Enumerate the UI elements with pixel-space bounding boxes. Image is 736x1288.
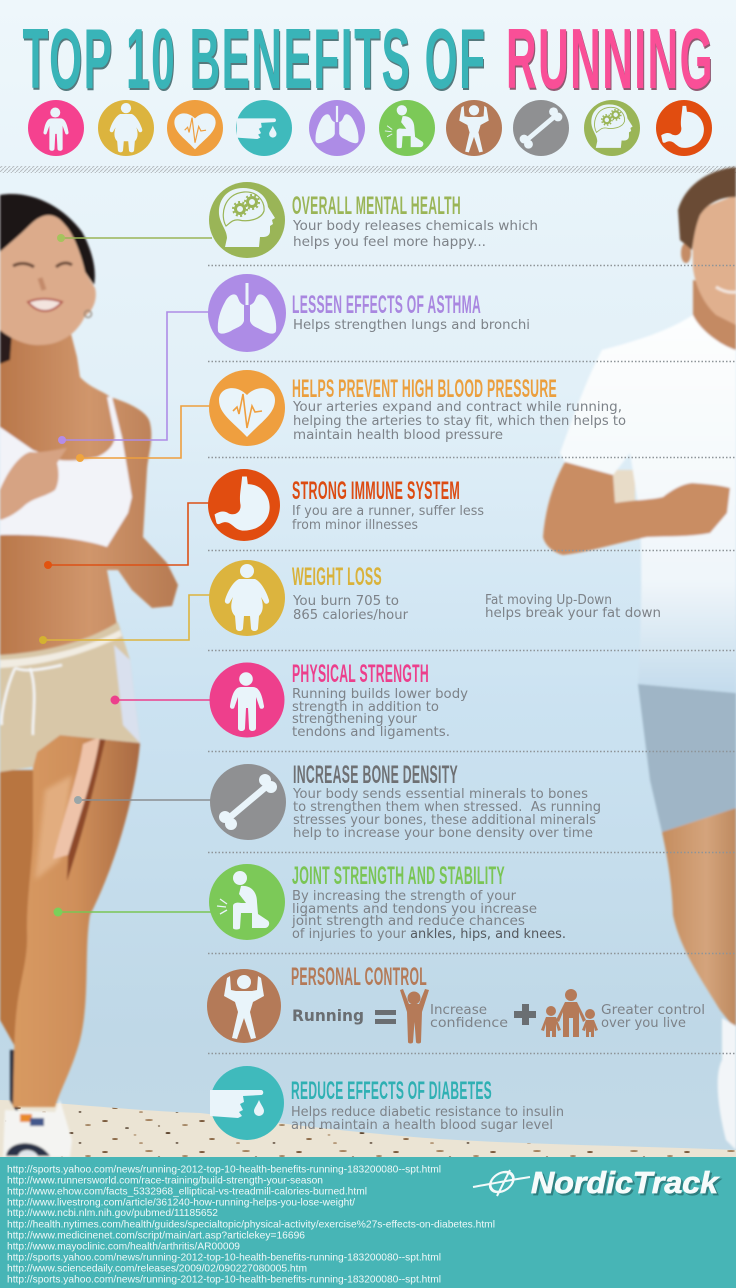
fist on chest <box>0 448 67 520</box>
connector: blood pressure <box>76 406 212 462</box>
front leg <box>13 735 140 1107</box>
panel: increase bone density: INCREASE BONE DENSITY <box>293 761 458 789</box>
icon: confident person <box>400 989 429 1044</box>
connector: weight <box>39 595 212 644</box>
text block: helping the arteries to stay fit, which then helps to <box>293 413 626 429</box>
plus sign <box>514 1004 536 1025</box>
logo text: NordicTrack <box>531 1165 720 1200</box>
panel: overall mental health <box>209 182 538 258</box>
text block: fat moving: Fat moving Up-Down <box>485 592 612 608</box>
text block <box>292 503 484 533</box>
icon: heart <box>209 370 285 446</box>
icon: brain head <box>209 182 285 258</box>
face <box>692 195 736 325</box>
text block: tendons and ligaments. <box>292 724 450 740</box>
text block <box>292 218 538 250</box>
text: greater control: over you live <box>601 1015 686 1031</box>
sand dune <box>0 1100 736 1160</box>
text block <box>292 786 601 841</box>
hair <box>678 167 736 250</box>
text block: By increasing the strength of your <box>292 888 516 904</box>
text block: ligaments and tendons you increase <box>292 901 537 917</box>
icon: overweight figure <box>98 100 154 156</box>
text block: calories: You burn 705 to <box>292 593 399 609</box>
equals sign <box>375 1010 396 1024</box>
shorts <box>0 622 140 772</box>
text block: strength in addition to <box>292 699 439 715</box>
leg shadow stripe <box>67 737 106 881</box>
text block: stresses your bones, these additional minerals <box>293 812 596 828</box>
footer band <box>0 1157 736 1288</box>
text block <box>292 399 626 443</box>
panel: strong immune system: STRONG IMMUNE SYSTEM <box>292 477 460 505</box>
panel: increase bone density <box>210 761 601 841</box>
text: increase confidence: Increase <box>430 1002 487 1018</box>
panel: weight loss: WEIGHT LOSS <box>292 563 382 591</box>
text block: Your arteries expand and contract while running, <box>292 399 622 415</box>
logo: NordicTrack <box>473 1165 722 1202</box>
panel: weight loss <box>209 560 661 636</box>
panel: helps prevent high blood pressure <box>209 370 626 446</box>
source links: http://www.medicinenet.com/script/main/art.asp?articlekey=16696 <box>7 1230 305 1242</box>
photo: man runner <box>543 167 736 1150</box>
icon: finger and drop <box>236 100 292 156</box>
icon: bone <box>513 100 569 156</box>
text block <box>292 686 468 740</box>
text block: calories: 865 calories/hour <box>293 607 408 623</box>
panel: strong immune system <box>208 469 484 541</box>
icon: overweight figure <box>209 560 285 636</box>
panel: personal control: PERSONAL CONTROL <box>291 963 427 991</box>
back shoe <box>10 1050 18 1115</box>
icon: family <box>541 989 598 1037</box>
panel: joint strength and stability: JOINT STRENGTH AND STABILITY <box>292 862 505 890</box>
logo swoosh <box>473 1170 530 1196</box>
text block: from minor illnesses <box>292 517 418 533</box>
text block: of injuries to your ankles, hips, and knees. <box>292 926 566 942</box>
top icon row <box>28 100 712 156</box>
text block: calories <box>292 593 408 623</box>
icon: lungs <box>208 274 286 352</box>
text block: Running builds lower body <box>292 686 468 702</box>
source links: http://www.sciencedaily.com/releases/2009/02/090227080005.htm <box>7 1262 307 1274</box>
text block: strengthening your <box>292 711 417 727</box>
text block: and maintain a health blood sugar level <box>291 1117 553 1133</box>
arm <box>543 462 730 555</box>
connector: immune <box>44 503 210 569</box>
panel: personal control <box>207 963 705 1044</box>
source links: http://sports.yahoo.com/news/running-2012-top-10-health-benefits-running-183200080--spt.html <box>7 1164 441 1176</box>
text block <box>291 888 566 942</box>
connector: bone <box>74 796 212 804</box>
ear <box>681 243 691 263</box>
smile <box>716 287 736 292</box>
text block: Helps reduce diabetic resistance to insulin <box>291 1104 564 1120</box>
source links: http://health.nytimes.com/health/guides/specialtopic/physical-activity/exercise%27s-effects-on-diabetes.html <box>7 1218 495 1230</box>
source links: http://www.runnersworld.com/race-training/build-strength-your-season <box>7 1174 323 1186</box>
connector: strength <box>110 696 212 704</box>
icon: heart <box>167 100 223 156</box>
connector: joint <box>54 908 212 916</box>
icon: person <box>210 662 284 738</box>
icon: brain head <box>584 100 640 156</box>
icon: flexing figure <box>207 969 281 1043</box>
torso and near arm <box>0 330 178 660</box>
thigh light patch <box>35 775 72 880</box>
leg highlight stripe <box>53 737 100 859</box>
shoe <box>718 1018 736 1150</box>
text block: maintain health blood pressure <box>293 427 503 443</box>
icon: finger and drop <box>210 1066 284 1140</box>
beige gap <box>605 470 635 510</box>
source links: http://sports.yahoo.com/news/running-2012-top-10-health-benefits-running-183200080--spt.html <box>7 1252 441 1264</box>
icon: lungs <box>309 100 365 156</box>
icon: bone <box>210 764 286 840</box>
connector: asthma <box>58 312 210 444</box>
panel: joint strength and stability <box>209 862 566 942</box>
front leg <box>662 808 736 1030</box>
icon: flexing figure <box>446 100 502 156</box>
text block: fat moving <box>485 592 661 621</box>
shorts <box>638 684 736 832</box>
text block: to strengthen them when stressed. As running <box>293 799 601 815</box>
panel: lessen effects of asthma <box>208 274 530 352</box>
connector: mental health <box>57 234 212 242</box>
source links: http://sports.yahoo.com/news/running-2012-top-10-health-benefits-running-183200080--spt.html <box>7 1274 441 1286</box>
source links: http://www.mayoclinic.com/health/arthritis/AR00009 <box>7 1240 240 1252</box>
panel: reduce effects of diabetes <box>210 1066 564 1140</box>
back leg <box>0 770 36 1050</box>
photo: woman runner <box>0 194 178 1157</box>
source links <box>7 1164 495 1286</box>
hatched header band <box>0 166 736 173</box>
hair back <box>0 194 95 285</box>
panel: reduce effects of diabetes: REDUCE EFFECTS OF DIABETES <box>291 1077 492 1105</box>
title <box>22 12 715 109</box>
text: increase confidence: confidence <box>430 1015 508 1031</box>
icon: person <box>28 100 84 156</box>
panel: physical strength: PHYSICAL STRENGTH <box>292 660 429 688</box>
logo shadow: NordicTrack <box>533 1167 722 1202</box>
icon: kneeling figure <box>209 864 285 940</box>
shirt <box>560 315 736 693</box>
hair lock <box>0 322 12 364</box>
text block: Your body releases chemicals which <box>292 218 538 234</box>
bra top <box>0 397 132 547</box>
text block: Helps strengthen lungs and bronchi <box>293 317 530 333</box>
icon: stomach <box>208 469 280 541</box>
icon: kneeling figure <box>379 100 435 156</box>
source links: http://www.livestrong.com/article/361240-how-running-helps-you-lose-weight/ <box>7 1196 355 1208</box>
shoe <box>3 1100 72 1157</box>
equation word: running: Running <box>292 1006 364 1025</box>
source links: http://www.ncbi.nlm.nih.gov/pubmed/11185652 <box>7 1207 218 1219</box>
panel: overall mental health: OVERALL MENTAL HEALTH <box>292 192 461 220</box>
text: increase confidence <box>430 1002 508 1031</box>
panel: physical strength <box>210 660 468 740</box>
neck <box>693 280 736 352</box>
text block: If you are a runner, suffer less <box>292 503 484 519</box>
source links: http://www.ehow.com/facts_5332968_elliptical-vs-treadmill-calories-burned.html <box>7 1186 367 1198</box>
panel: lessen effects of asthma: LESSEN EFFECTS OF ASTHMA <box>292 291 481 319</box>
text: greater control: Greater control <box>601 1002 705 1018</box>
text block <box>291 1104 564 1133</box>
face <box>0 215 96 345</box>
text block: fat moving: helps break your fat down <box>485 605 661 621</box>
text block: joint strength and reduce chances <box>291 913 525 929</box>
facial features <box>13 263 92 318</box>
icon: stomach <box>656 100 712 156</box>
text block: helps you feel more happy... <box>293 234 486 250</box>
text block: Your body sends essential minerals to bones <box>292 786 588 802</box>
text block: help to increase your bone density over time <box>293 825 593 841</box>
text: greater control <box>601 1002 705 1031</box>
